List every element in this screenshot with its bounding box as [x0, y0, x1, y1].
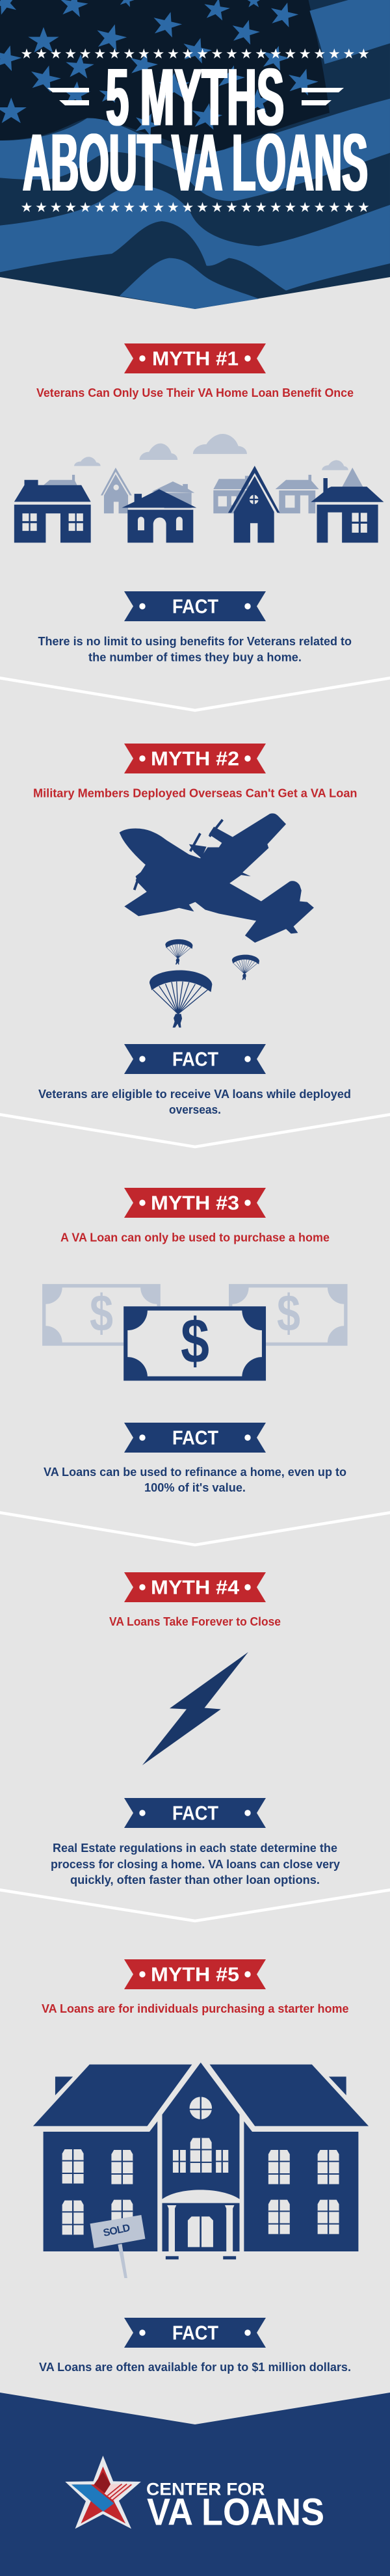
dollar sign centre: $ — [181, 1306, 209, 1376]
myth 2 banner — [124, 744, 266, 773]
dollar sign left: $ — [90, 1284, 113, 1342]
section: myth 2 — [33, 744, 358, 1116]
fact 4 banner: FACT — [172, 1802, 218, 1825]
wing windows — [62, 2149, 339, 2234]
clouds — [74, 434, 348, 470]
myth 2 banner: MYTH #2 — [151, 747, 239, 770]
myth 4 banner — [124, 1572, 266, 1602]
fact 1 text: There is no limit to using benefits for Veterans related to — [38, 635, 352, 648]
myth 5 banner: MYTH #5 — [151, 1963, 239, 1986]
section: myth 5 — [33, 1959, 369, 2374]
dollar sign right: $ — [277, 1284, 300, 1342]
house E — [228, 466, 280, 543]
fact 2 banner: FACT — [172, 1048, 218, 1071]
fact 3 banner — [124, 1423, 266, 1453]
background houses — [44, 468, 363, 513]
centre bill — [124, 1306, 266, 1381]
title side bars left — [47, 88, 89, 105]
myth 3 banner — [124, 1188, 266, 1218]
myth 1 statement: Veterans Can Only Use Their VA Home Loan Benefit Once — [36, 386, 354, 399]
porch columns and door — [167, 2205, 234, 2251]
fact 2 text: Veterans are eligible to receive VA loans while deployed — [38, 1088, 351, 1101]
illustration: dollar bills — [42, 1284, 348, 1381]
small parachutist left — [165, 939, 192, 965]
fact 4 text: process for closing a home. VA loans can close very — [51, 1858, 340, 1871]
section: myth 1 — [14, 343, 384, 664]
fact 4 banner — [124, 1798, 266, 1828]
house H — [311, 478, 384, 543]
illustration: neighbourhood of houses and clouds — [14, 434, 384, 543]
logo wordmark: VA LOANS — [147, 2491, 324, 2533]
logo star — [65, 2456, 141, 2529]
myth 4 banner: MYTH #4 — [151, 1576, 240, 1599]
fact 3 text: 100% of it's value. — [144, 1481, 246, 1494]
icon: lightning bolt — [142, 1652, 248, 1765]
fact 1 banner — [124, 591, 266, 621]
fact 1 banner: FACT — [172, 595, 218, 618]
fact 2 text — [38, 1088, 351, 1116]
house C — [122, 489, 196, 543]
fact 4 text: Real Estate regulations in each state determine the — [53, 1842, 337, 1855]
pale bill left — [42, 1284, 161, 1346]
fact 4 text: quickly, often faster than other loan options. — [70, 1873, 320, 1886]
myth 1 banner: MYTH #1 — [152, 347, 239, 370]
fact 3 text — [44, 1466, 346, 1494]
flag background — [0, 0, 390, 309]
illustration: mansion with sold sign — [33, 2063, 369, 2278]
myth 4 statement: VA Loans Take Forever to Close — [109, 1615, 281, 1628]
title — [23, 53, 368, 208]
title side bars right — [302, 88, 344, 105]
bottom row of stars — [21, 202, 369, 212]
fact 3 banner: FACT — [172, 1427, 218, 1449]
myth 3 banner: MYTH #3 — [151, 1192, 239, 1214]
footer panel — [0, 2393, 390, 2576]
pale bill right — [229, 1284, 348, 1346]
fact 2 text: overseas. — [169, 1103, 221, 1116]
logo wordmark: CENTER FOR — [146, 2480, 265, 2499]
fact 5 text: VA Loans are often available for up to $1 million dollars. — [39, 2361, 351, 2374]
top row of stars — [21, 48, 369, 59]
centre windows — [173, 2138, 228, 2173]
myth 3 statement: A VA Loan can only be used to purchase a home — [60, 1231, 330, 1244]
mansion roof — [33, 2065, 369, 2126]
fact 2 banner — [124, 1044, 266, 1074]
sold label: SOLD — [102, 2223, 131, 2239]
section: myth 4 — [51, 1572, 340, 1886]
section: myth 3 — [42, 1188, 348, 1494]
small parachutist right — [232, 955, 259, 980]
fact 1 text: the number of times they buy a home. — [88, 651, 302, 664]
fact 1 text — [38, 635, 352, 664]
fact 5 banner — [124, 2318, 266, 2348]
myth 5 statement: VA Loans are for individuals purchasing a starter home — [42, 2002, 348, 2015]
illustration: cargo plane and parachutists — [120, 813, 314, 1028]
fact 5 banner: FACT — [172, 2322, 218, 2344]
sold sign board and post — [90, 2215, 145, 2278]
house A — [14, 480, 91, 543]
plane — [120, 813, 314, 943]
header panel — [0, 0, 390, 309]
fact 4 text — [51, 1842, 340, 1886]
large parachutist — [150, 970, 212, 1028]
round window — [189, 2097, 213, 2120]
fact 3 text: VA Loans can be used to refinance a home, even up to — [44, 1466, 346, 1479]
mansion body — [44, 2063, 358, 2259]
myth 2 statement: Military Members Deployed Overseas Can't Get a VA Loan — [33, 787, 358, 800]
myth 5 banner — [124, 1959, 266, 1989]
myth 1 banner — [124, 343, 266, 373]
